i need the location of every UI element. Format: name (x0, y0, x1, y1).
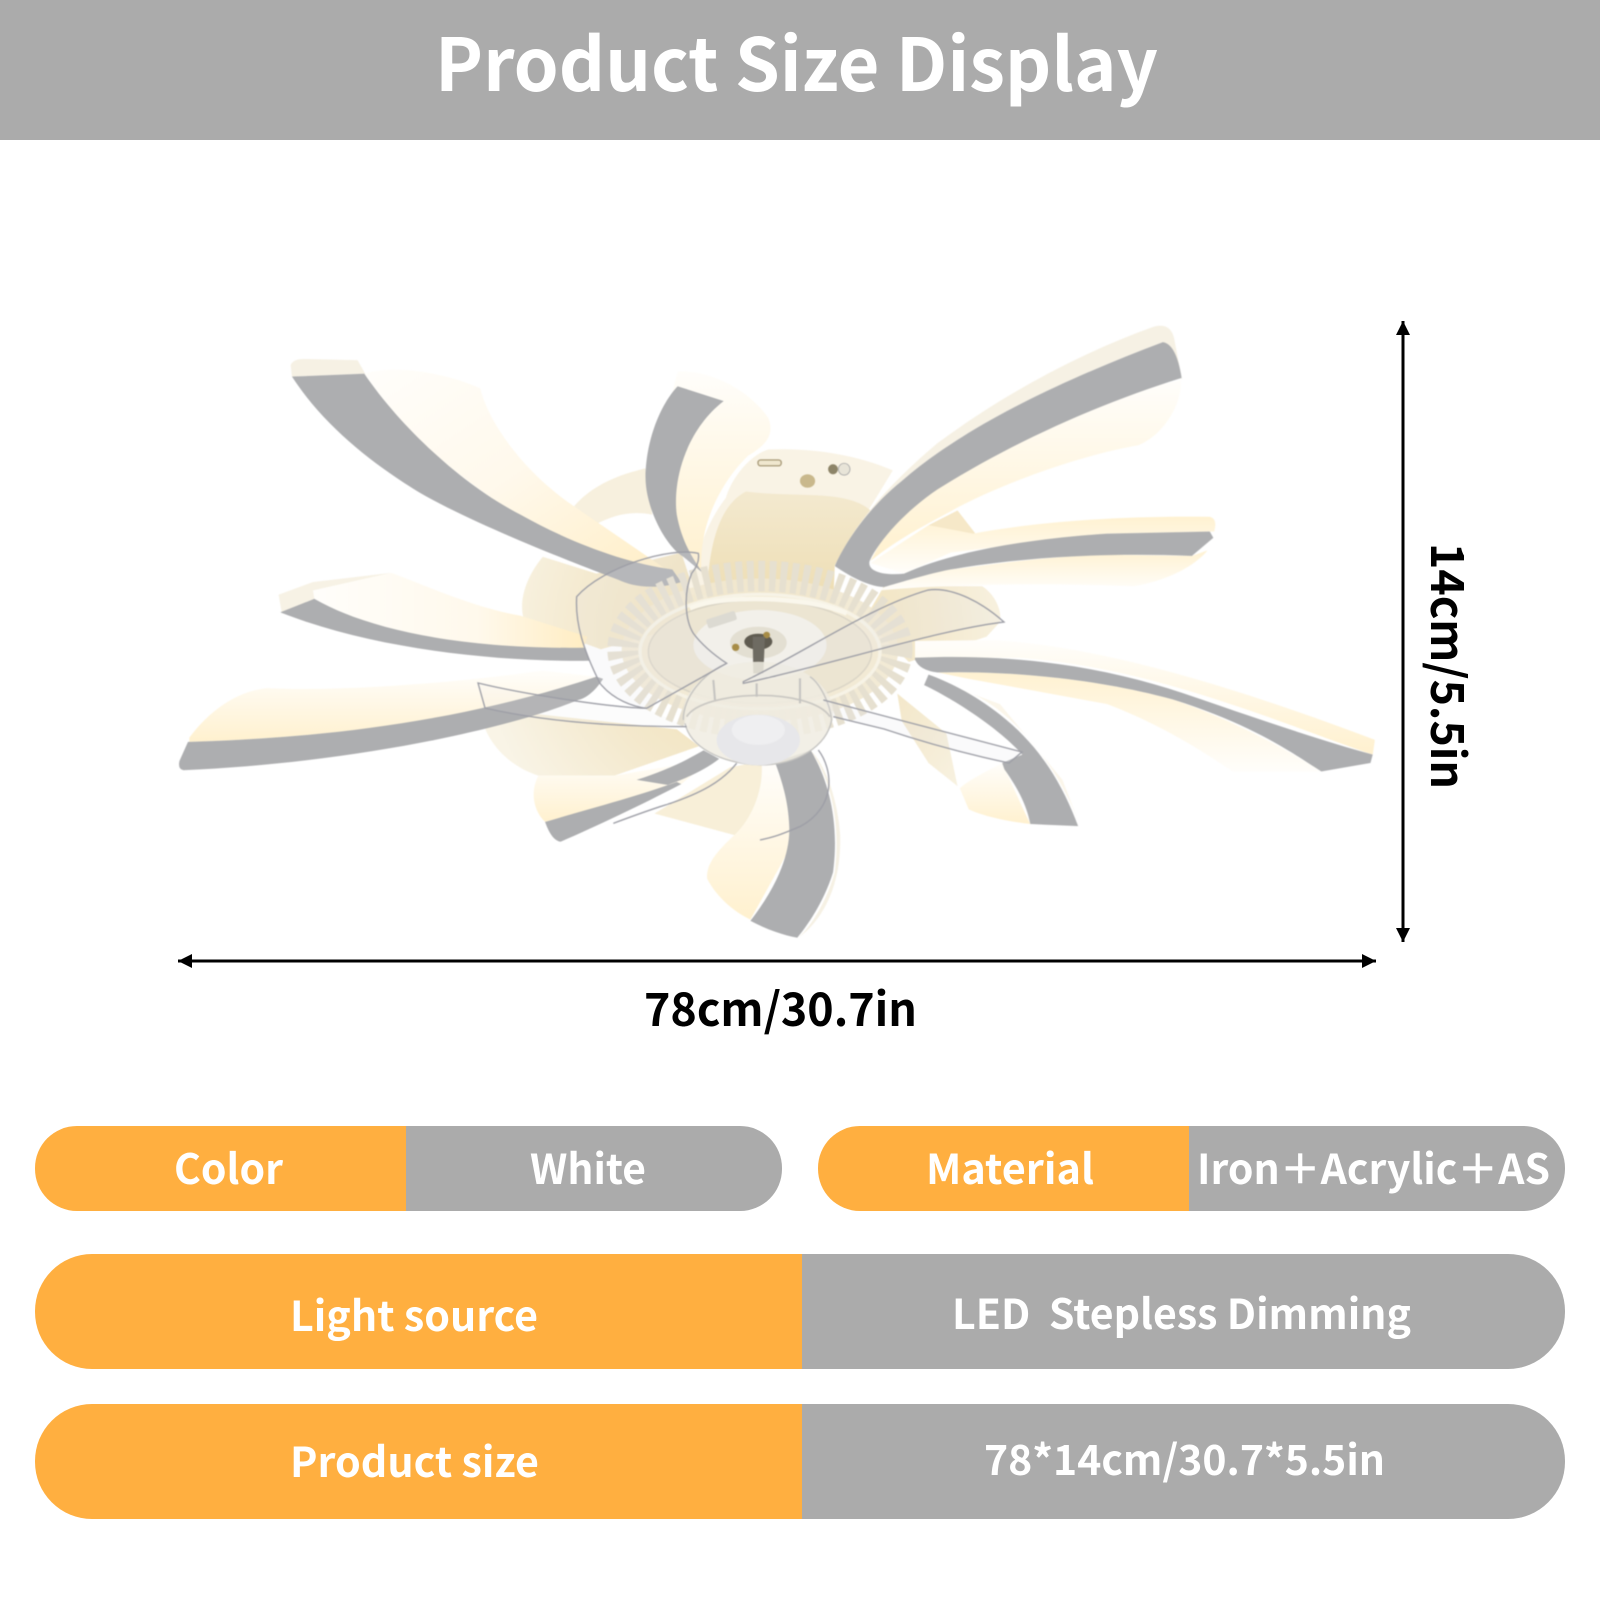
central hub with crystal ring (478, 552, 1022, 840)
blade 4 left lower (179, 670, 603, 770)
blade 3 left middle (279, 573, 590, 661)
spec pill: color: Color (174, 1136, 284, 1196)
height label: 14cm/5.5in (1417, 543, 1483, 789)
blade 10 right lower small (924, 675, 1079, 826)
blade 9 right lower large (915, 640, 1375, 771)
blade 5 lower left small (534, 750, 719, 842)
spec pill: color: White (530, 1136, 646, 1196)
width label: 78cm/30.7in (644, 974, 917, 1040)
back disc pieces (483, 449, 1000, 839)
transparent fan blades (478, 552, 1022, 840)
blade 2 top centre (646, 371, 770, 574)
title: Product Size Display (435, 7, 1158, 113)
blade 7 top right (835, 326, 1182, 566)
spec pill: product size: Product size (290, 1429, 539, 1489)
spec pill: material (818, 1126, 1565, 1211)
spec pill: product size: 78*14cm/30.7*5.5in (984, 1427, 1385, 1487)
blade 6 bottom (707, 750, 840, 938)
width dimension arrow (178, 954, 1376, 968)
spec pill: material: Iron＋Acrylic＋AS (1197, 1136, 1550, 1196)
header banner (0, 0, 1600, 140)
crystal spoke ring (622, 576, 898, 723)
transparent lower housing (683, 662, 833, 765)
ceiling fan light product illustration (179, 326, 1375, 938)
spec pill: color (35, 1126, 782, 1211)
spec pill: material: Material (926, 1136, 1094, 1196)
blade 1 top left (291, 359, 681, 587)
spec pill: light source (35, 1254, 1565, 1369)
spec pill: light source: LED Stepless Dimming (952, 1281, 1411, 1341)
blade 8 right middle (835, 342, 1215, 590)
height dimension arrow (1396, 321, 1410, 942)
motor plate and rod (693, 610, 827, 680)
spec pill: light source: Light source (290, 1283, 538, 1343)
spec pill: product size (35, 1404, 1565, 1519)
